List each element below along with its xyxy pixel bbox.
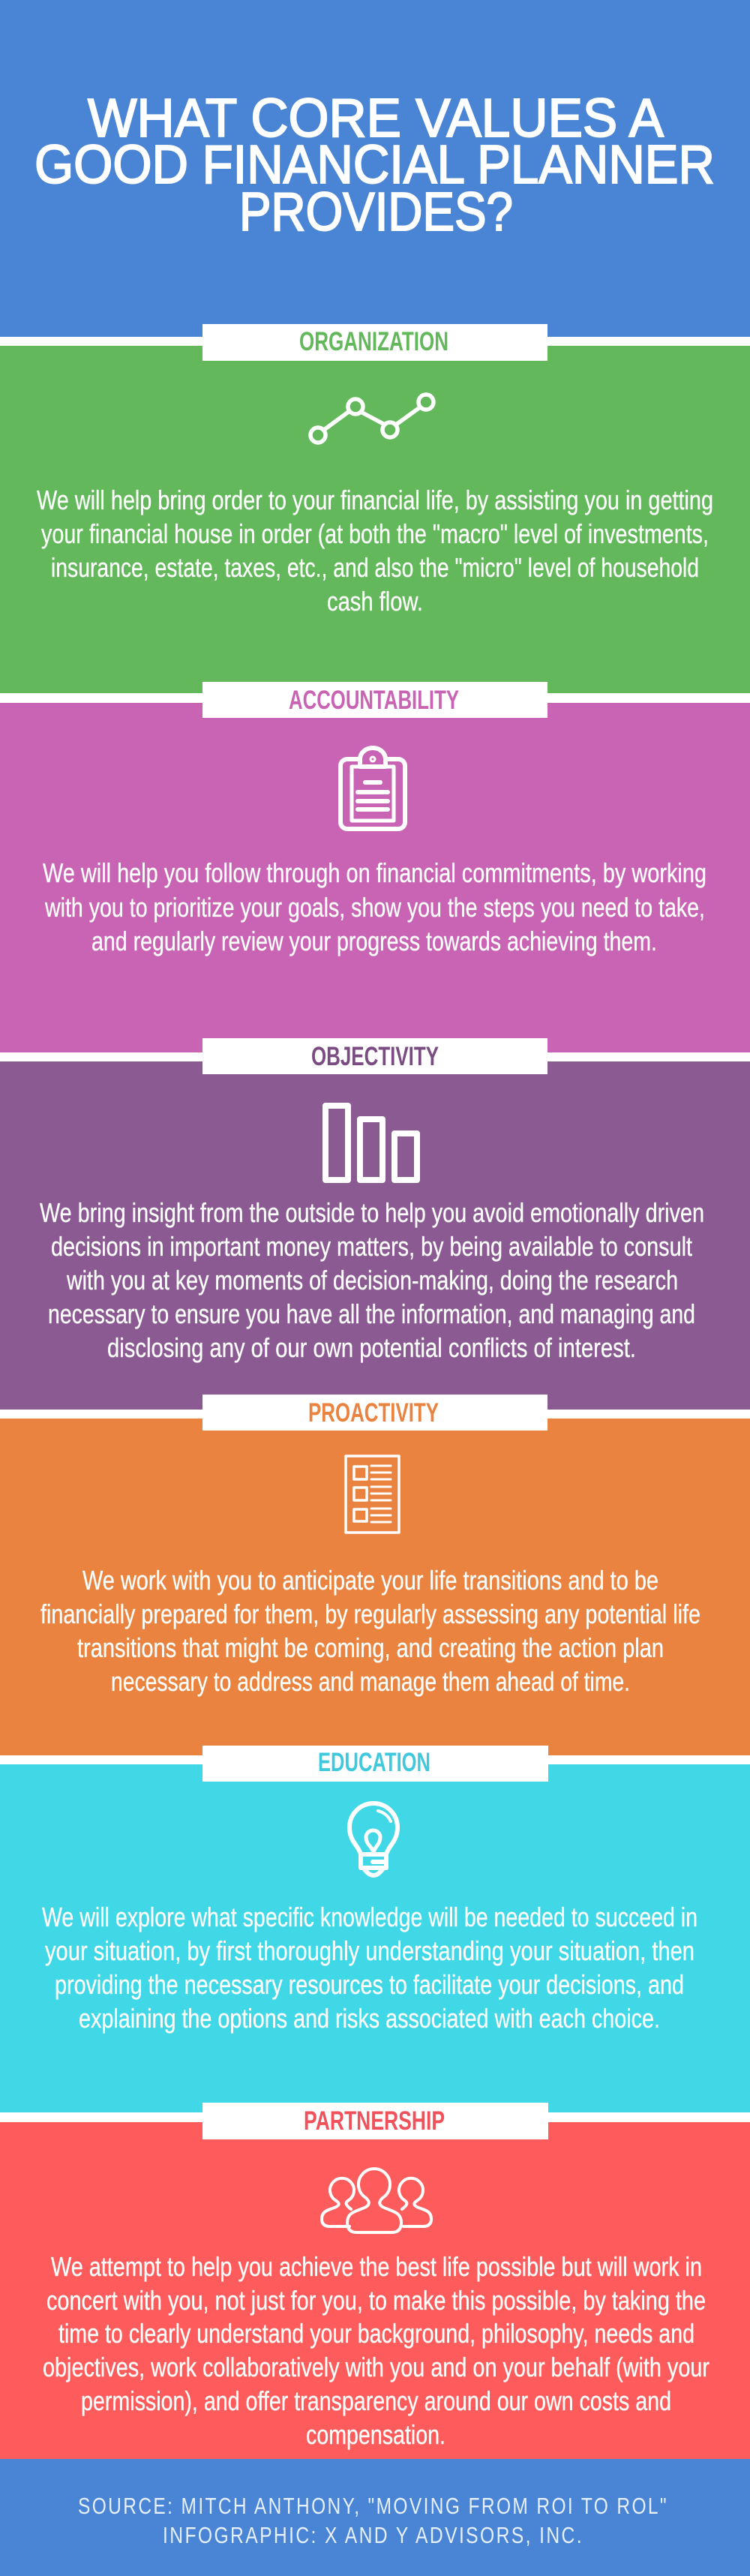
heading: objectivity [202,1038,548,1074]
heading: partnership: PARTNERSHIP [304,2106,445,2136]
text: source and credit: INFOGRAPHIC: X AND Y ADVISORS, INC. [163,2522,584,2548]
text: objectivity description [40,1197,704,1363]
panel: footer source [0,2459,750,2576]
heading: objectivity: OBJECTIVITY [311,1042,439,1071]
panel: objectivity [0,1038,750,1410]
heading: proactivity: PROACTIVITY [308,1398,439,1428]
icon: group of people [322,2169,431,2232]
panel: accountability [0,682,750,1052]
text: source and credit [78,2493,668,2548]
heading: organization [202,324,548,361]
text: organization description [37,485,713,617]
text: education description [42,1902,698,2034]
text: organization description: cash flow. [327,586,423,617]
icon: light bulb [350,1803,398,1875]
panel: organization [0,324,750,693]
icon: clipboard [340,748,405,829]
panel: proactivity [0,1395,750,1755]
panel: header [0,0,750,337]
icon: line chart [310,395,434,443]
panel: partnership [0,2103,750,2459]
text: partnership description [43,2251,710,2450]
heading: education [202,1746,548,1782]
text: proactivity description [40,1565,700,1697]
icon: bar chart [326,1106,417,1180]
text: accountability description [43,857,706,956]
title: GOOD FINANCIAL PLANNER [34,135,715,195]
heading: organization: ORGANIZATION [299,327,448,356]
icon: checklist [346,1456,399,1533]
title: WHAT CORE VALUES A [88,89,664,149]
text: objectivity description: disclosing any of our own potential conflicts of interest. [107,1332,636,1363]
title [34,89,715,242]
heading: proactivity [202,1395,548,1431]
heading: partnership [202,2103,548,2139]
heading: education: EDUCATION [318,1748,430,1777]
text: partnership description: compensation. [306,2419,446,2450]
panel: education [0,1746,750,2112]
heading: accountability: ACCOUNTABILITY [289,686,459,715]
title: PROVIDES? [239,182,513,242]
heading: accountability [202,682,548,718]
